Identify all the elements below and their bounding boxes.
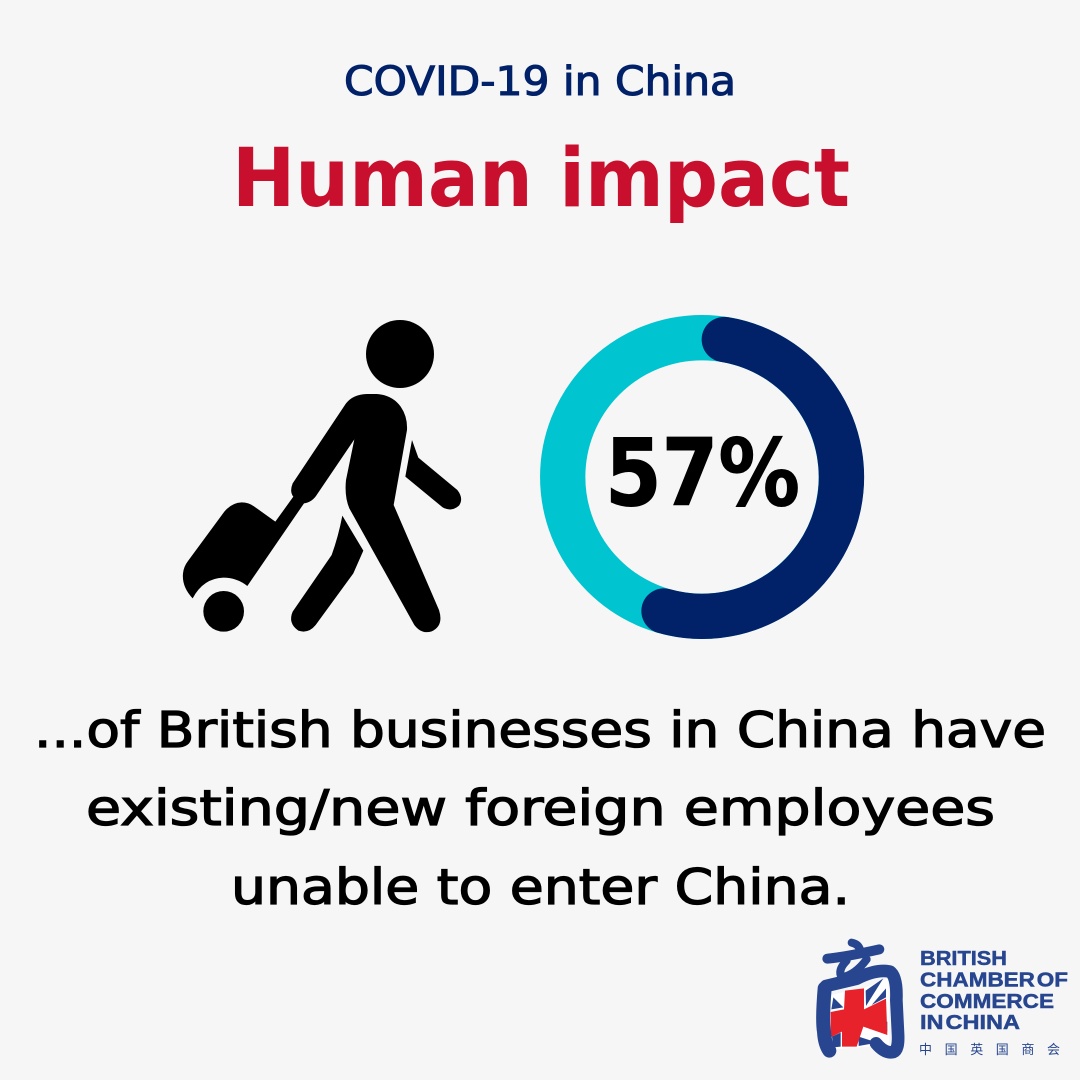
logo wordmark: COMMERCE: [920, 990, 1054, 1013]
donut value: 57%: [605, 419, 800, 527]
logo: British Chamber of Commerce in China: [823, 943, 1068, 1058]
donut chart: 57%: [563, 338, 841, 616]
icon: traveller pulling suitcase: [183, 320, 461, 632]
logo wordmark: [920, 947, 1068, 1034]
body text: [34, 702, 1046, 916]
logo emblem: [823, 943, 898, 1052]
body text: unable to enter China.: [231, 859, 850, 916]
logo wordmark: CHAMBER OF: [920, 968, 1068, 992]
logo Chinese name: 中国英国商会: [919, 1043, 1060, 1058]
body text: existing/new foreign employees: [86, 780, 995, 837]
logo wordmark: BRITISH: [920, 947, 1007, 970]
subtitle: COVID-19 in China: [344, 59, 736, 105]
title: Human impact: [232, 132, 850, 226]
logo wordmark: IN CHINA: [920, 1011, 1020, 1034]
body text: ...of British businesses in China have: [34, 702, 1046, 759]
